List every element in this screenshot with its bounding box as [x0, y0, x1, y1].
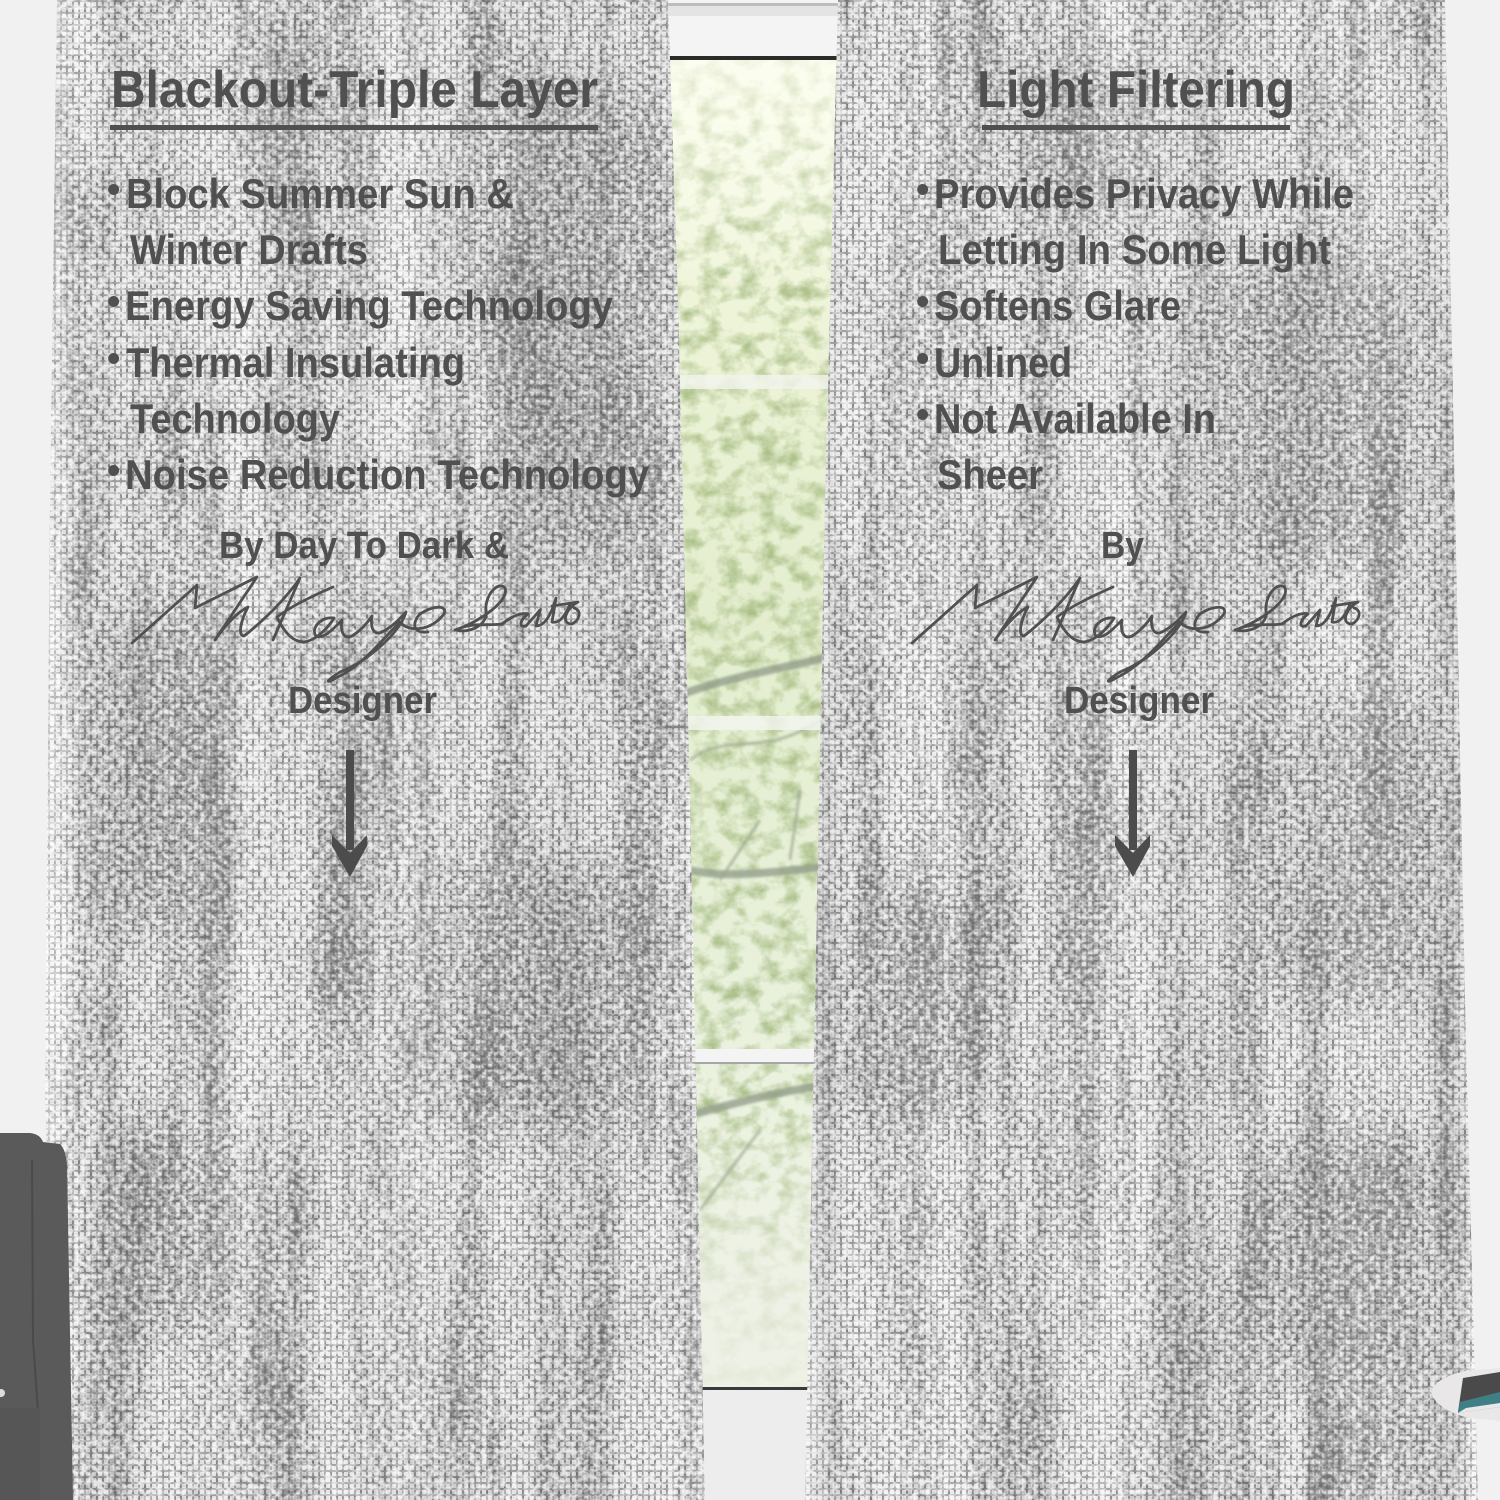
bullet list: blackout features: Technology: [130, 395, 341, 442]
designer label: Designer: [1064, 680, 1214, 722]
bullet list: blackout features: Winter Drafts: [130, 226, 368, 273]
arrow: down: [1115, 750, 1150, 877]
bullet list: light filtering features: •: [916, 394, 929, 436]
signature: Mikayo Saito: [132, 577, 579, 681]
window mullions: [665, 375, 840, 1064]
armchair: [0, 1133, 73, 1500]
bullet list: light filtering features: •: [916, 169, 929, 211]
heading underline: [110, 125, 598, 130]
bullet list: blackout features: Block Summer Sun &: [126, 170, 514, 217]
arrow: down: [332, 750, 367, 877]
window top trim: [660, 0, 845, 60]
bullet list: blackout features: [107, 169, 650, 498]
bullet list: blackout features: Energy Saving Technology: [125, 282, 614, 329]
heading: light filtering: Light Filtering: [977, 61, 1295, 119]
bullet list: blackout features: •: [107, 169, 120, 211]
panel: left curtain: [40, 0, 710, 1500]
text block: light filtering: [912, 61, 1359, 877]
bullet list: light filtering features: [916, 169, 1354, 498]
bullet list: light filtering features: •: [916, 338, 929, 380]
panel: right curtain: [800, 0, 1490, 1500]
window glass foliage: [665, 60, 840, 1388]
window with trees outside: [668, 3, 838, 1390]
bullet list: light filtering features: Sheer: [937, 451, 1043, 498]
bullet list: blackout features: •: [107, 450, 120, 492]
designer label: Designer: [288, 680, 437, 722]
bullet list: light filtering features: •: [916, 281, 929, 323]
window sill: [690, 1387, 815, 1500]
heading underline: [982, 125, 1290, 130]
bullet list: light filtering features: Letting In Some Light: [938, 226, 1331, 273]
bullet list: light filtering features: Provides Privacy While: [934, 170, 1354, 217]
text block: blackout triple layer: [107, 61, 650, 877]
credit line: By: [1101, 525, 1144, 567]
bullet list: blackout features: Noise Reduction Technology: [125, 451, 650, 498]
heading: blackout triple layer: Blackout-Triple Layer: [111, 61, 598, 119]
bullet list: light filtering features: Softens Glare: [934, 282, 1181, 329]
credit line: By Day To Dark &: [219, 525, 509, 567]
bullet list: blackout features: Thermal Insulating: [126, 339, 465, 386]
bullet list: blackout features: •: [107, 281, 120, 323]
signature: Mikayo Saito: [912, 577, 1359, 681]
side table with book: [1431, 1368, 1500, 1421]
bullet list: light filtering features: Not Available In: [934, 395, 1216, 442]
bullet list: blackout features: •: [107, 338, 120, 380]
bullet list: light filtering features: Unlined: [934, 339, 1072, 386]
